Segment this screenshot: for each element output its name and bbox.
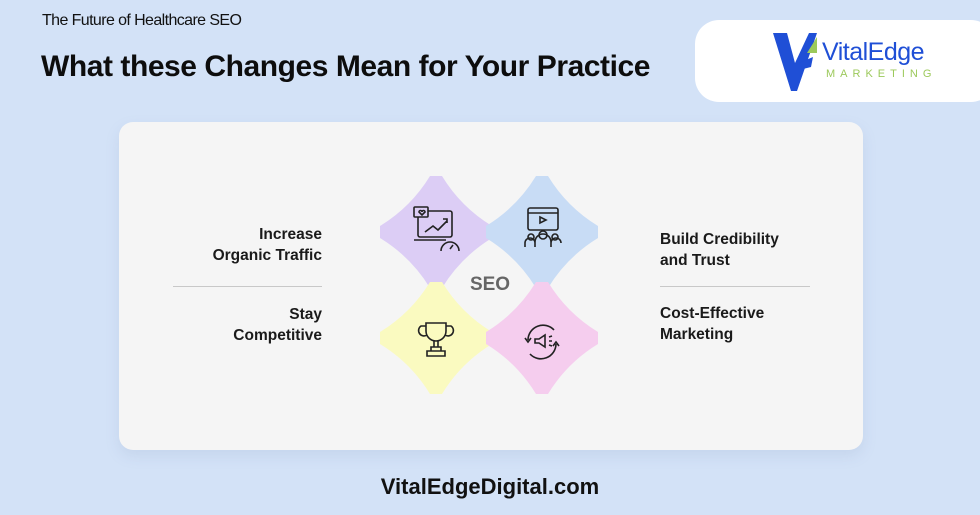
label: cost-effective: Cost-Effective	[660, 305, 764, 322]
label: build credibility: Build Credibility	[660, 231, 779, 248]
icon: video audience	[525, 208, 561, 247]
panel	[119, 122, 863, 450]
label: stay competitive	[233, 306, 322, 344]
icon: megaphone cycle	[525, 325, 559, 359]
label: build credibility	[660, 231, 779, 269]
label: stay competitive: Competitive	[233, 327, 322, 344]
logo box	[695, 20, 980, 102]
label: increase organic traffic: Increase	[259, 226, 322, 243]
label: stay competitive: Stay	[289, 306, 322, 323]
icon: laptop chart	[414, 207, 459, 251]
label: increase organic traffic: Organic Traffic	[213, 247, 322, 264]
footer url: VitalEdgeDigital.com	[381, 474, 599, 499]
logo text: VitalEdge	[822, 38, 924, 66]
logo box: MARKETING	[826, 68, 936, 80]
icon: logo mark	[773, 33, 817, 91]
tile: yellow	[380, 282, 492, 394]
label: build credibility: and Trust	[660, 252, 730, 269]
label: cost-effective: Marketing	[660, 326, 733, 343]
label: cost-effective	[660, 305, 764, 343]
dividers	[173, 286, 322, 287]
tile: blue	[486, 176, 598, 288]
label: increase organic traffic	[213, 226, 322, 264]
title: What these Changes Mean for Your Practice	[41, 50, 650, 83]
icon: trophy	[419, 323, 453, 356]
center label: SEO	[470, 274, 510, 295]
tile: pink	[486, 282, 598, 394]
tile: purple	[380, 176, 492, 288]
subtitle: The Future of Healthcare SEO	[42, 12, 241, 29]
